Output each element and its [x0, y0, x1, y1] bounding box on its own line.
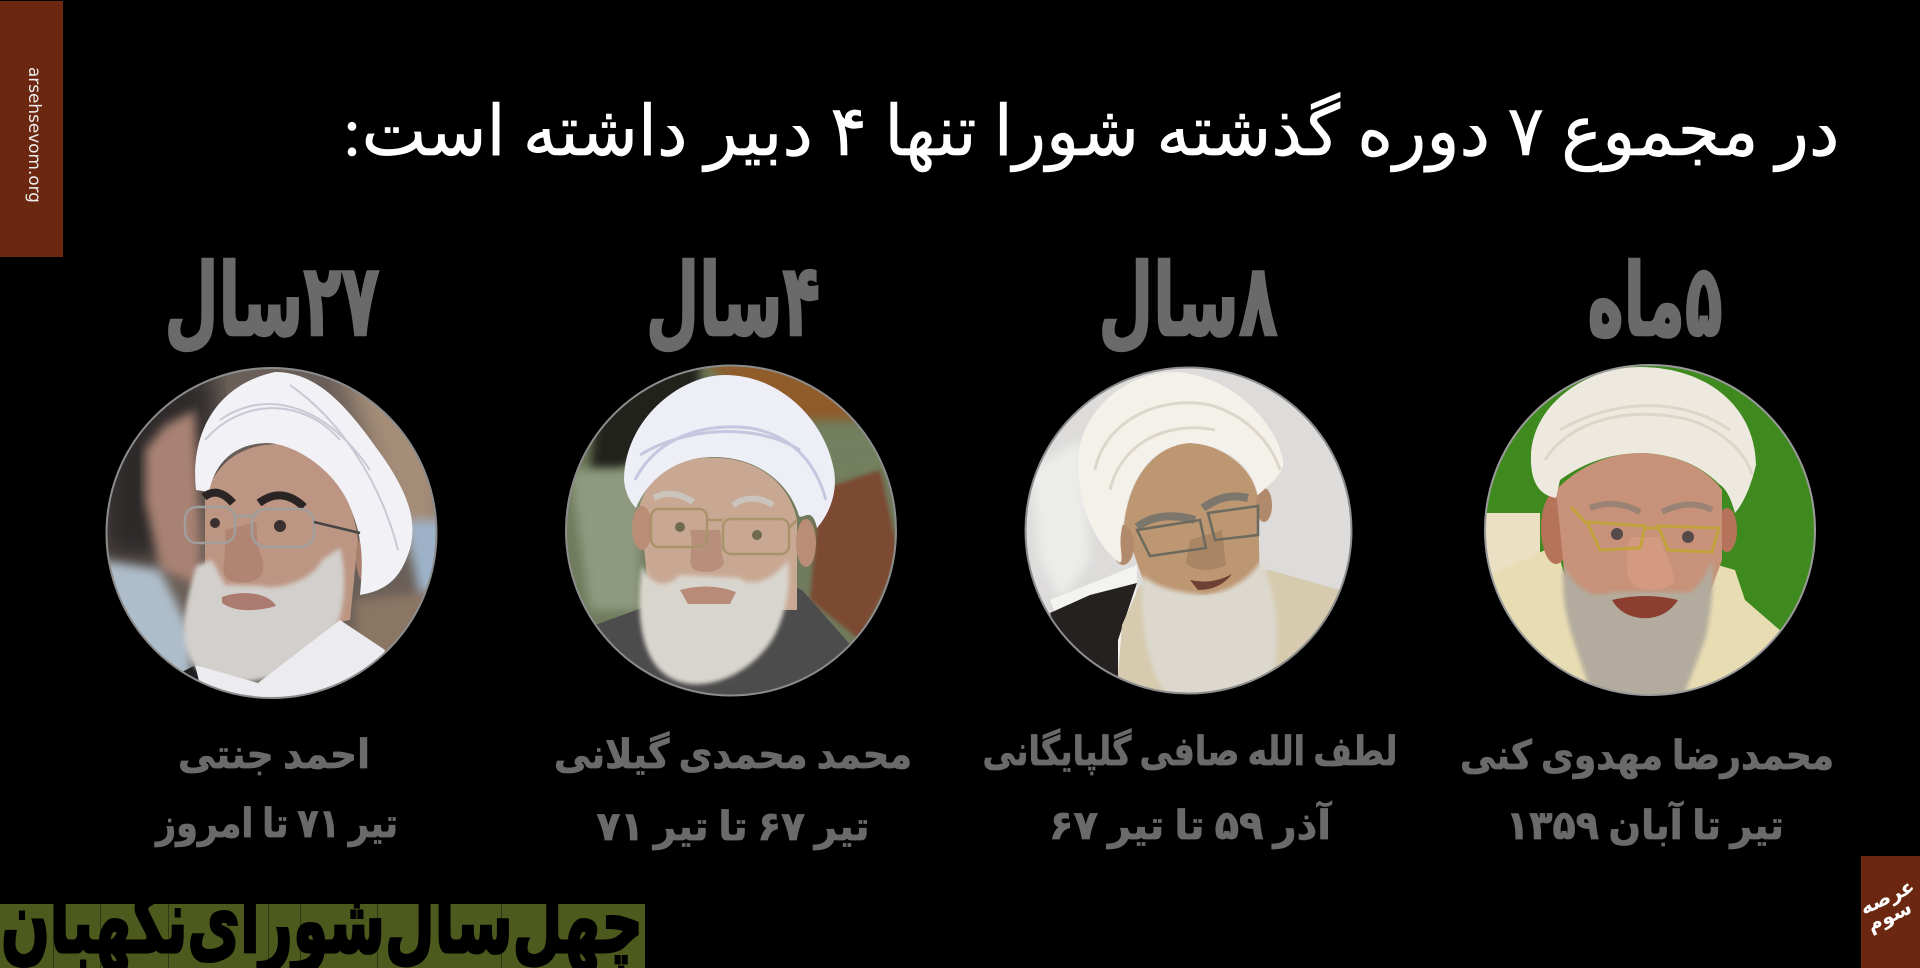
duration: 5 months: ۵ماه	[1588, 246, 1722, 357]
glasses	[1137, 506, 1258, 556]
face	[205, 444, 358, 640]
dates: تیر ۶۷ تا تیر ۷۱	[596, 804, 870, 850]
beard	[1563, 560, 1713, 705]
glasses	[185, 507, 360, 547]
portrait: Ahmad Jannati	[100, 360, 445, 705]
title: در مجموع ۷ دوره گذشته شورا تنها ۴ دبیر داشته است:	[343, 92, 1839, 173]
side tab: website	[0, 1, 63, 257]
robes	[1050, 565, 1137, 672]
portrait: Mohammadreza Mahdavi Kani	[1480, 360, 1820, 705]
eyebrows	[654, 494, 773, 505]
side tab: website: arsehsevom.org	[24, 67, 44, 203]
beard	[184, 548, 344, 682]
beard	[1142, 560, 1277, 705]
duration: 27 years: ۲۷سال	[164, 246, 380, 357]
column: Ahmad Jannati	[100, 246, 445, 847]
turban	[624, 375, 835, 528]
portrait: Lotfollah Safi Golpayegani	[1020, 360, 1360, 705]
turban	[1078, 372, 1283, 563]
collar	[195, 620, 385, 705]
robe	[595, 585, 855, 700]
logo tab: عرصه	[1857, 875, 1918, 920]
robe	[1492, 550, 1592, 683]
duration: 4 years: ۴سال	[646, 246, 820, 357]
duration: 8 years: ۸سال	[1098, 246, 1278, 357]
glasses	[1571, 507, 1719, 552]
face	[1124, 443, 1260, 600]
name: محمد محمدی گیلانی	[554, 731, 912, 777]
glasses	[651, 509, 797, 554]
eyebrows	[204, 493, 304, 507]
column: Mohammad Mohammadi Gilani	[554, 246, 912, 850]
column: Mohammadreza Mahdavi Kani	[1460, 246, 1834, 849]
logo tab: سوم	[1864, 897, 1915, 936]
dates: تیر ۷۱ تا امروز	[154, 801, 398, 847]
turban	[1531, 367, 1756, 513]
face	[640, 458, 797, 610]
portrait: Mohammad Mohammadi Gilani	[560, 360, 905, 705]
name: محمدرضا مهدوی کنی	[1460, 733, 1834, 779]
logo tab	[1857, 856, 1920, 968]
face	[1556, 453, 1722, 598]
eyebrows	[1137, 496, 1248, 527]
dates: آذر ۵۹ تا تیر ۶۷	[1049, 800, 1332, 849]
beard	[639, 560, 789, 684]
name: لطف الله صافی گلپایگانی	[982, 728, 1398, 775]
dates: تیر تا آبان ۱۳۵۹	[1506, 800, 1784, 849]
eyebrows	[1590, 504, 1712, 512]
ears	[1541, 496, 1563, 564]
turban	[195, 372, 412, 595]
column: Lotfollah Safi Golpayegani	[982, 246, 1398, 849]
name: احمد جنتی	[178, 732, 370, 777]
bottom banner	[0, 904, 645, 968]
